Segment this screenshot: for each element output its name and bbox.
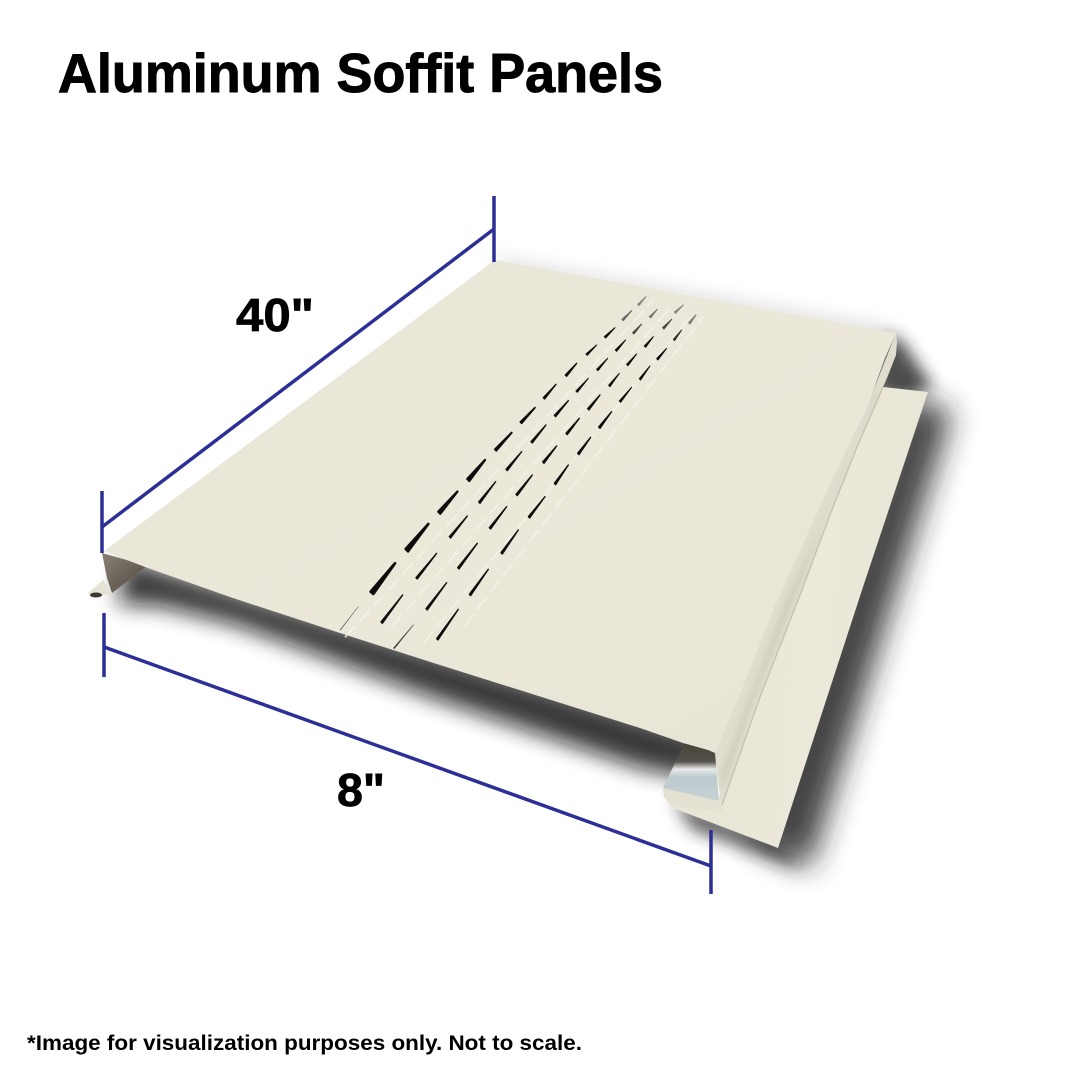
footnote: *Image for visualization purposes only. Not to scale. bbox=[27, 1032, 582, 1055]
lower flange bbox=[663, 387, 928, 848]
left end lip bbox=[88, 580, 112, 598]
dimension label: 40 inches: 40" bbox=[236, 289, 314, 341]
title: Aluminum Soffit Panels bbox=[58, 42, 663, 104]
soffit panel illustration bbox=[88, 256, 952, 868]
drop shadow: upper right bbox=[870, 338, 932, 400]
drop shadow: below flange bbox=[672, 798, 802, 868]
drop shadow: under panel bbox=[118, 558, 715, 778]
drop shadow: flange right side bbox=[750, 395, 952, 868]
left end curl bbox=[90, 592, 102, 598]
drop shadow: top edge bbox=[495, 256, 900, 345]
slot column 4 bbox=[437, 315, 696, 640]
slot column 2 bbox=[381, 309, 657, 623]
dimension line: 40 inch length bbox=[102, 196, 494, 553]
folded edge strip bbox=[715, 333, 897, 807]
slot column 1 bbox=[340, 297, 646, 630]
vent highlights bbox=[345, 300, 703, 643]
dimension label: 8 inches: 8" bbox=[337, 764, 385, 816]
open channel end with bare metal bbox=[663, 742, 719, 801]
fold ridge line bbox=[722, 387, 883, 805]
left end return bbox=[102, 553, 147, 593]
main panel face bbox=[104, 260, 896, 753]
slot column 3 bbox=[394, 305, 683, 649]
folded edge strip shading bbox=[720, 390, 881, 790]
flange lip under opening bbox=[663, 788, 724, 812]
dimension line: 8 inch width bbox=[104, 613, 711, 894]
vent slots bbox=[340, 297, 696, 649]
